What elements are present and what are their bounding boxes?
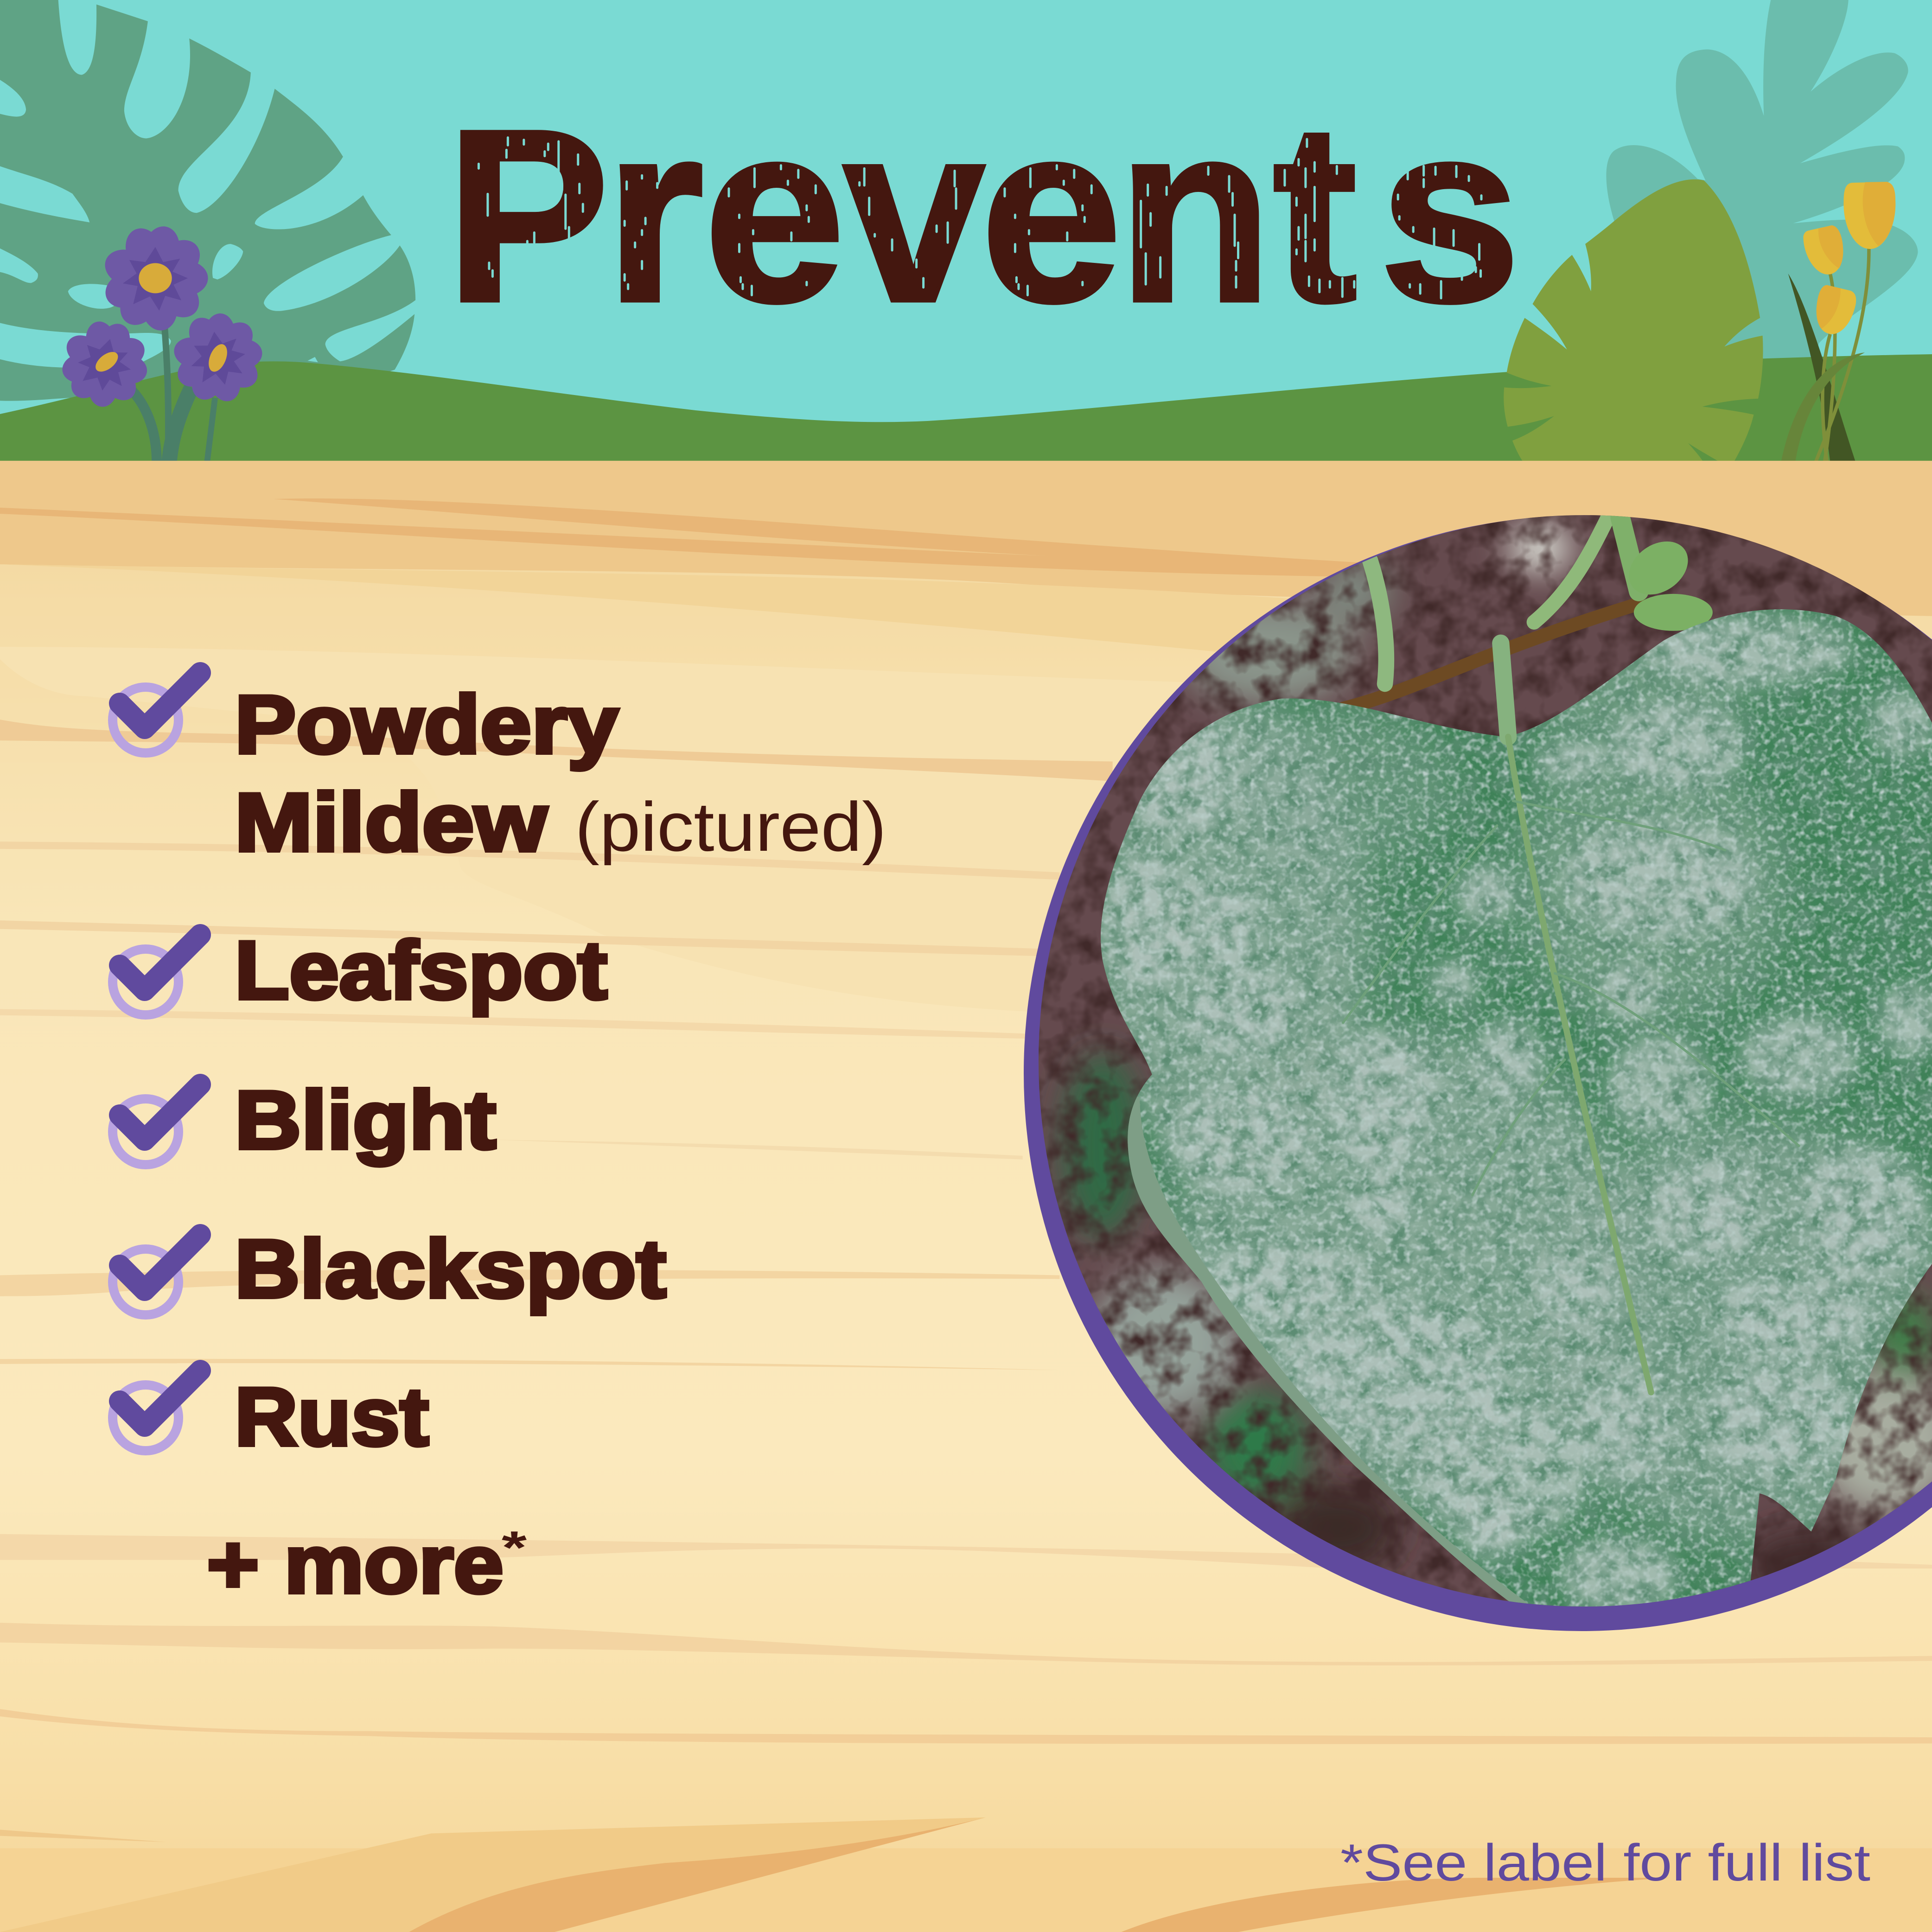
leaf veins — [1343, 643, 1799, 1392]
tulip upper — [1803, 225, 1843, 274]
label: Blackspot — [235, 1223, 666, 1315]
item: Blackspot — [113, 1223, 666, 1315]
mildew mottling — [1084, 592, 1932, 1626]
asterisk: * — [502, 1522, 527, 1574]
background texture — [1010, 493, 1932, 1664]
item: Leafspot — [113, 924, 607, 1016]
check icon — [113, 1371, 200, 1451]
bottom orange streak — [409, 1817, 986, 1932]
check icon — [113, 1084, 200, 1165]
label: Rust — [235, 1371, 429, 1463]
title: revents — [605, 71, 1521, 355]
branch — [1343, 604, 1639, 708]
list: diseases prevented — [113, 673, 886, 1610]
top dark band — [0, 461, 1932, 616]
label second line: Mildew — [235, 776, 548, 868]
pale knot region — [0, 647, 1232, 1016]
sky background — [0, 0, 1932, 464]
purple flower large — [100, 223, 208, 333]
photo background — [1010, 493, 1932, 1664]
item: Blight — [113, 1074, 496, 1166]
purple flower left — [51, 310, 156, 416]
mid-tone cast — [1097, 628, 1932, 1540]
label: Blight — [235, 1074, 496, 1166]
item: Powdery Mildew — [113, 673, 886, 868]
item: more: + more — [207, 1518, 504, 1610]
monstera holes — [68, 244, 318, 362]
purple photo frame — [1024, 516, 1932, 1631]
tulip large — [1843, 182, 1895, 249]
tulip stems — [1816, 249, 1869, 461]
purple flower right — [165, 305, 268, 410]
light grass blade — [1781, 352, 1865, 461]
header scene — [0, 0, 1932, 464]
grain stripes — [0, 498, 1932, 1842]
photo: leaf with powdery mildew — [1010, 493, 1932, 1664]
blurred background patches — [1063, 526, 1932, 1599]
label: Leafspot — [235, 924, 607, 1016]
mildew blotches — [1102, 616, 1932, 1612]
bottom wood shape — [0, 1817, 986, 1932]
dark grass blade — [1788, 274, 1855, 461]
buds and stalks — [1370, 517, 1713, 684]
check icon — [113, 935, 200, 1015]
bottom right streak — [1121, 1878, 1670, 1932]
pale background leaf — [1606, 0, 1918, 373]
footnote: *See label for full list — [1340, 1834, 1870, 1892]
title: P — [446, 79, 609, 352]
ground hill — [0, 354, 1932, 464]
note: (pictured) — [575, 788, 886, 866]
lower wood band — [0, 1848, 1932, 1932]
monstera leaf — [0, 0, 415, 414]
flower stems — [128, 324, 215, 463]
wood background — [0, 461, 1932, 1932]
check icon — [113, 1235, 200, 1315]
photo clipped — [1010, 493, 1932, 1664]
item: Rust — [113, 1371, 429, 1463]
leaf edge — [1128, 1097, 1522, 1614]
olive leaf — [1504, 179, 1763, 462]
check icon — [113, 673, 200, 753]
tulip lower — [1817, 285, 1856, 334]
label: Powdery — [235, 678, 618, 771]
leaf — [1084, 592, 1932, 1626]
tulips — [1781, 182, 1895, 461]
